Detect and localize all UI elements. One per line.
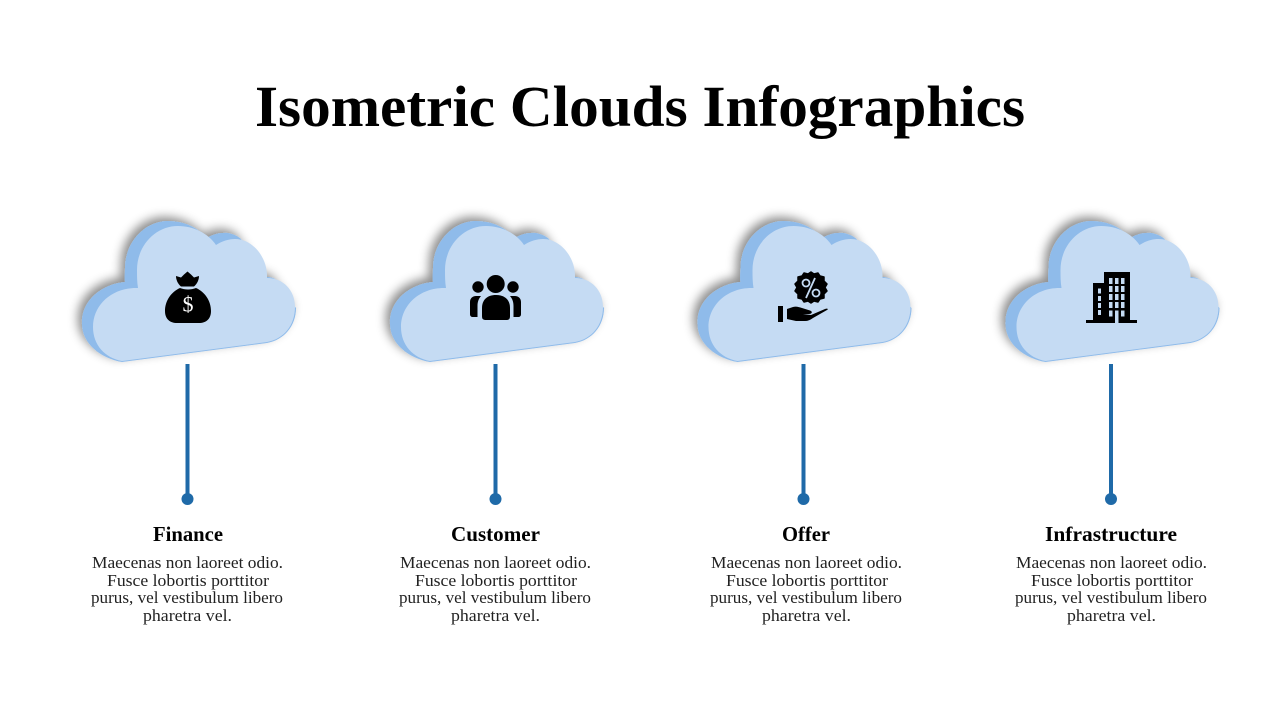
cloud: finance bbox=[82, 221, 296, 362]
panel: infrastructure bbox=[1005, 221, 1220, 625]
text: finance description: pharetra vel. bbox=[143, 606, 232, 625]
icon: building bbox=[1086, 272, 1137, 323]
cloud: infrastructure bbox=[1005, 221, 1220, 362]
text: offer description: pharetra vel. bbox=[762, 606, 851, 625]
text: offer description bbox=[710, 553, 902, 625]
connector line bbox=[494, 364, 498, 496]
text: infrastructure description bbox=[1015, 553, 1207, 625]
cloud: offer bbox=[697, 221, 912, 362]
panel: customer bbox=[390, 221, 604, 625]
text: finance description bbox=[91, 553, 283, 625]
text: customer description: Maecenas non laoreet odio. bbox=[400, 553, 591, 572]
connector line bbox=[1109, 364, 1113, 496]
icon: people bbox=[470, 275, 521, 320]
connector dot bbox=[490, 493, 502, 505]
connector dot bbox=[1105, 493, 1117, 505]
connector line bbox=[802, 364, 806, 496]
icon: money bag: $ bbox=[182, 292, 194, 316]
text: offer description: Maecenas non laoreet odio. bbox=[711, 553, 902, 572]
heading: infrastructure: Infrastructure bbox=[1045, 522, 1177, 546]
text: customer description: Fusce lobortis porttitor bbox=[415, 571, 578, 590]
text: infrastructure description: purus, vel vestibulum libero bbox=[1015, 588, 1207, 607]
heading: offer: Offer bbox=[782, 522, 830, 546]
connector dot bbox=[798, 493, 810, 505]
text: infrastructure description: Maecenas non laoreet odio. bbox=[1016, 553, 1207, 572]
title: Isometric Clouds Infographics bbox=[255, 74, 1025, 139]
heading: customer: Customer bbox=[451, 522, 540, 546]
heading: finance: Finance bbox=[153, 522, 223, 546]
panel: finance bbox=[82, 221, 296, 625]
text: customer description bbox=[399, 553, 591, 625]
icon: money bag bbox=[165, 272, 211, 323]
panel: offer bbox=[697, 221, 912, 625]
icon: hand with percent badge bbox=[778, 272, 828, 322]
text: offer description: Fusce lobortis porttitor bbox=[726, 571, 889, 590]
text: infrastructure description: Fusce lobortis porttitor bbox=[1031, 571, 1194, 590]
text: offer description: purus, vel vestibulum libero bbox=[710, 588, 902, 607]
text: finance description: purus, vel vestibulum libero bbox=[91, 588, 283, 607]
cloud: customer bbox=[390, 221, 604, 362]
text: finance description: Fusce lobortis porttitor bbox=[107, 571, 270, 590]
text: customer description: pharetra vel. bbox=[451, 606, 540, 625]
connector dot bbox=[182, 493, 194, 505]
text: finance description: Maecenas non laoreet odio. bbox=[92, 553, 283, 572]
connector line bbox=[186, 364, 190, 496]
text: customer description: purus, vel vestibulum libero bbox=[399, 588, 591, 607]
text: infrastructure description: pharetra vel. bbox=[1067, 606, 1156, 625]
